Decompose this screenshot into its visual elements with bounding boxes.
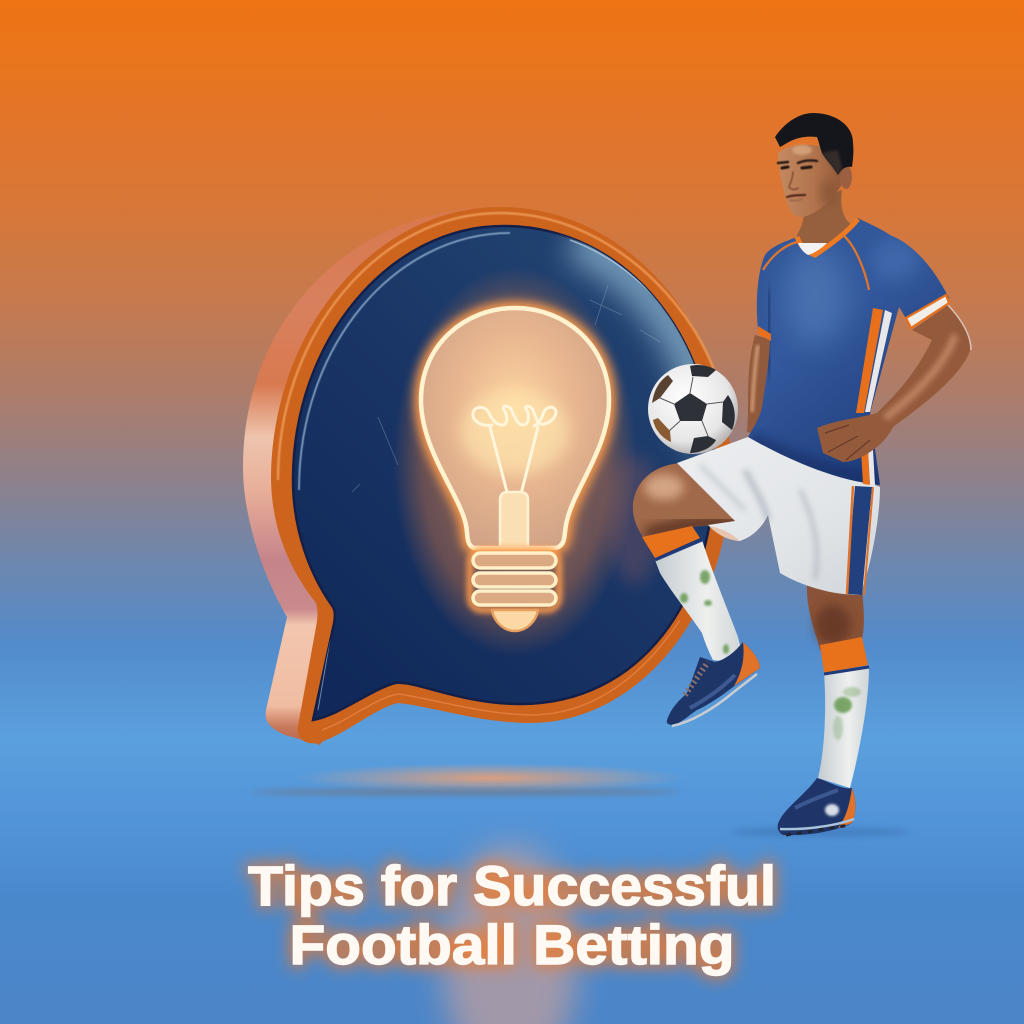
bulb halo — [393, 267, 637, 657]
football — [648, 364, 738, 454]
head — [775, 113, 853, 217]
bubble: lit crescent and reflections — [299, 233, 712, 710]
raised sock grass stains — [680, 570, 729, 654]
bulb: filament coil — [473, 406, 556, 426]
shorts stripe edge right — [864, 487, 873, 595]
jersey: sleeve cuff — [906, 295, 949, 328]
speech bubble with light bulb — [243, 207, 731, 745]
viewer-left arm — [747, 335, 772, 434]
face: forehead highlight — [792, 145, 812, 155]
jersey: side orange stripe — [856, 308, 883, 485]
title glow — [248, 854, 776, 976]
title glow: Football Betting — [290, 913, 734, 976]
bulb: outer glow — [421, 308, 609, 548]
bulb: tip — [492, 610, 538, 631]
bubble: navy face — [293, 226, 714, 720]
bubble: surface scratches — [352, 285, 660, 492]
face: cheek shadow — [820, 180, 836, 204]
face — [778, 145, 852, 217]
jersey — [748, 218, 949, 485]
shorts: folds — [700, 465, 817, 580]
bubble: 3D side extrusion — [243, 207, 500, 745]
shorts — [677, 437, 880, 595]
bubble: rim highlight — [278, 213, 725, 480]
jersey: shading — [750, 238, 919, 480]
hair — [775, 113, 853, 175]
raised sock band — [642, 526, 700, 558]
bulb: filament supports — [490, 427, 538, 492]
jersey: side white stripe — [865, 310, 892, 485]
title glow: Tips for Successful — [248, 854, 776, 917]
raised sock trim — [655, 540, 702, 560]
bulb: screw ring 1 — [473, 553, 556, 568]
title text — [248, 854, 776, 976]
jersey: white v-neck — [798, 243, 827, 255]
bubble: orange front rim — [271, 207, 731, 743]
floor reflections and light column — [250, 763, 910, 1024]
icon: light bulb — [421, 308, 609, 631]
raised thigh — [633, 463, 745, 537]
hair: side fade — [822, 150, 842, 175]
bulb: stem — [500, 492, 528, 547]
bulb: screw glow — [470, 550, 559, 610]
raised boot — [667, 642, 760, 726]
title — [248, 854, 776, 976]
sock band trim — [824, 667, 869, 674]
title text: Tips for Successful — [248, 854, 776, 917]
bubble: lower rim highlight — [322, 620, 680, 730]
shorts stripe edge left — [847, 486, 853, 594]
standing leg — [807, 585, 864, 650]
ear — [840, 165, 852, 189]
standing leg sock — [818, 668, 869, 788]
bulb: screw ring 3 — [473, 591, 556, 605]
shorts: skin-tone lining — [709, 526, 740, 541]
raised leg sock — [655, 540, 742, 661]
facial features — [778, 160, 817, 201]
viewer-right arm and hand — [817, 305, 971, 462]
jersey: left sleeve cuff — [758, 326, 771, 341]
neck — [797, 190, 852, 250]
standing sock grass stain — [833, 687, 861, 740]
jersey: collar — [797, 219, 858, 255]
bulb: screw ring 2 — [473, 573, 556, 587]
standing boot — [778, 778, 855, 835]
football player — [633, 113, 971, 835]
bulb: glass — [421, 308, 609, 548]
bulb: filament glow — [460, 390, 570, 474]
standing leg sock band — [820, 637, 868, 673]
shorts stripe — [846, 486, 872, 595]
title text: Football Betting — [290, 913, 734, 976]
jersey: raglan piping — [763, 235, 869, 290]
